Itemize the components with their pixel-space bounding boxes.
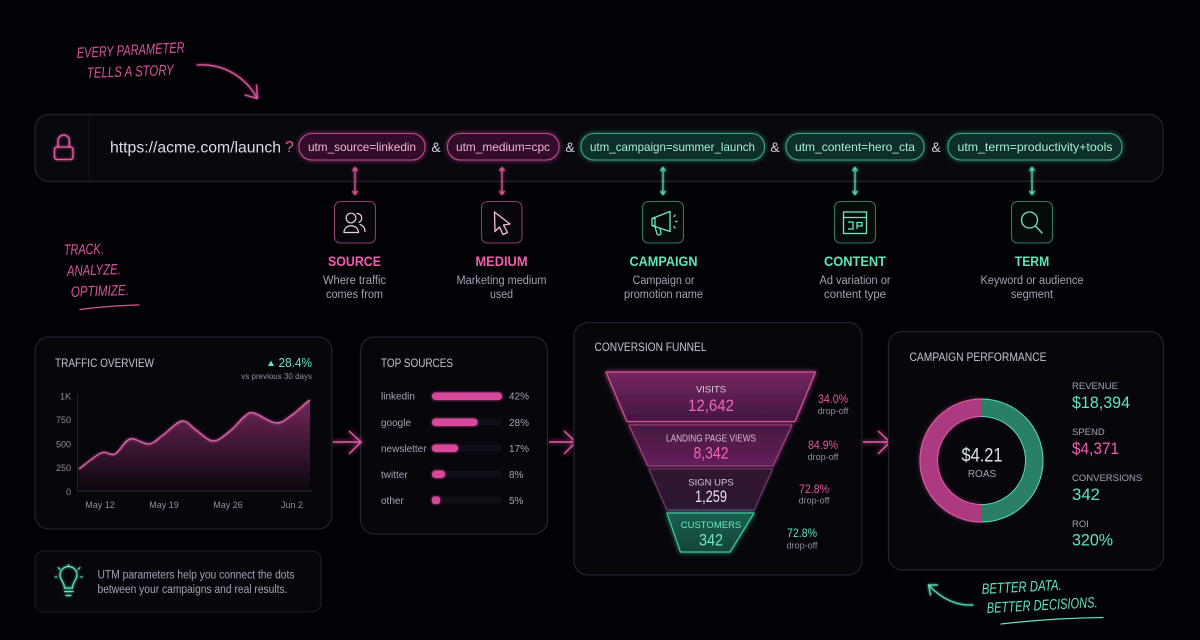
change indicator bbox=[241, 355, 312, 381]
description: comes from bbox=[326, 289, 383, 301]
tip text: between your campaigns and real results. bbox=[98, 584, 288, 596]
parameter: campaign bbox=[624, 202, 703, 301]
icon: megaphone bbox=[642, 202, 684, 243]
arrow: funnel to performance bbox=[863, 431, 890, 454]
handwritten note: every parameter: TELLS A STORY bbox=[87, 62, 175, 82]
bar list: 5% bbox=[509, 496, 524, 507]
donut chart: $4.21 bbox=[962, 446, 1002, 466]
pill: utm_campaign bbox=[581, 134, 764, 160]
parameter: term bbox=[980, 202, 1084, 301]
funnel: sign ups bbox=[649, 469, 772, 510]
drop-off labels: 34.0% bbox=[818, 394, 848, 406]
tip text: UTM parameters help you connect the dots bbox=[98, 570, 295, 582]
line chart: 1K bbox=[60, 392, 71, 402]
description: Marketing medium bbox=[456, 275, 546, 287]
parameter: content bbox=[820, 202, 891, 301]
arrow: note to performance bbox=[928, 585, 973, 605]
pill: utm_source bbox=[299, 134, 425, 160]
ampersand: & bbox=[431, 139, 441, 155]
drop-off labels: drop-off bbox=[787, 540, 818, 550]
panel: traffic overview bbox=[35, 337, 332, 529]
description bbox=[323, 275, 386, 301]
handwritten note: better data: BETTER DECISIONS. bbox=[986, 594, 1098, 617]
pill: utm_term: utm_term=productivity+tools bbox=[958, 140, 1112, 154]
line chart: May 19 bbox=[149, 500, 179, 510]
question mark: ? bbox=[285, 139, 294, 156]
ampersand: & bbox=[770, 139, 780, 155]
icon: magnifier bbox=[1012, 202, 1052, 243]
funnel: landing page views bbox=[629, 425, 792, 466]
description: content type bbox=[824, 289, 886, 301]
panel: top sources bbox=[360, 337, 548, 534]
handwritten note: track analyze optimize: ANALYZE. bbox=[66, 261, 121, 280]
heading: TRAFFIC OVERVIEW bbox=[55, 358, 154, 370]
funnel: customers bbox=[667, 513, 754, 552]
pill: utm_medium bbox=[448, 134, 559, 160]
icon: light bulb bbox=[55, 564, 82, 596]
ampersand: & bbox=[565, 139, 575, 155]
metrics: 320% bbox=[1072, 530, 1113, 550]
funnel: customers: CUSTOMERS bbox=[681, 520, 741, 531]
bar list: 28% bbox=[509, 418, 529, 429]
description: segment bbox=[1011, 289, 1054, 301]
funnel: visits: 12,642 bbox=[688, 396, 734, 415]
handwritten note: every parameter: EVERY PARAMETER bbox=[76, 39, 185, 62]
drop-off labels bbox=[787, 394, 849, 550]
description: used bbox=[490, 289, 513, 301]
handwritten note: better data: BETTER DATA. bbox=[981, 577, 1062, 598]
arrow: sources to funnel bbox=[549, 431, 576, 454]
change indicator: vs previous 30 days bbox=[241, 372, 312, 381]
bar list: google bbox=[381, 418, 411, 429]
description bbox=[624, 275, 703, 301]
metrics: SPEND bbox=[1072, 427, 1105, 438]
label: CAMPAIGN bbox=[630, 254, 698, 269]
change indicator: 28.4% bbox=[278, 355, 312, 370]
metrics: $18,394 bbox=[1072, 393, 1130, 412]
handwritten note: every parameter bbox=[76, 39, 185, 82]
donut chart: ROAS bbox=[968, 469, 996, 480]
bar list: 8% bbox=[509, 470, 524, 481]
label: CONTENT bbox=[824, 254, 887, 269]
arrows: pills to parameters bbox=[352, 168, 1034, 194]
icon: people bbox=[334, 202, 376, 243]
arrow: traffic to sources bbox=[333, 431, 361, 454]
icon: cursor bbox=[482, 202, 522, 243]
heading: CONVERSION FUNNEL bbox=[594, 342, 707, 354]
line chart: Jun 2 bbox=[281, 500, 303, 510]
bar list: 42% bbox=[509, 392, 529, 402]
description bbox=[820, 275, 891, 301]
parameter: medium bbox=[456, 202, 546, 301]
funnel: sign ups: SIGN UPS bbox=[688, 478, 734, 488]
arrow: note to URL bar bbox=[197, 65, 258, 98]
icon: ad window bbox=[834, 202, 876, 243]
line chart: 750 bbox=[56, 415, 71, 425]
line chart: 250 bbox=[56, 463, 71, 473]
donut chart bbox=[920, 399, 1043, 522]
URL bar bbox=[35, 114, 1163, 182]
metrics bbox=[1072, 381, 1142, 550]
bar list: twitter bbox=[381, 470, 408, 481]
funnel: customers: 342 bbox=[699, 532, 723, 550]
metrics: $4,371 bbox=[1072, 439, 1119, 458]
icon: lock bbox=[54, 135, 73, 160]
handwritten note: track analyze optimize bbox=[64, 241, 139, 310]
description: Where traffic bbox=[323, 275, 386, 287]
drop-off labels: drop-off bbox=[818, 406, 849, 416]
URL text: https://acme.com/launch bbox=[110, 140, 281, 156]
pill: utm_source: utm_source=linkedin bbox=[308, 140, 416, 154]
parameter: source bbox=[323, 202, 386, 301]
bar list bbox=[381, 392, 529, 507]
drop-off labels: drop-off bbox=[799, 496, 830, 506]
handwritten note: track analyze optimize: OPTIMIZE. bbox=[71, 282, 129, 301]
line chart bbox=[56, 392, 312, 510]
description: Campaign or bbox=[632, 275, 695, 287]
label: SOURCE bbox=[328, 254, 381, 269]
bar list: 17% bbox=[509, 444, 529, 455]
funnel: visits: VISITS bbox=[696, 384, 726, 396]
description bbox=[456, 275, 546, 301]
label: MEDIUM bbox=[476, 254, 528, 269]
funnel: landing page views: LANDING PAGE VIEWS bbox=[666, 434, 756, 444]
metrics: ROI bbox=[1072, 519, 1089, 530]
drop-off labels: drop-off bbox=[808, 452, 839, 462]
line chart: May 12 bbox=[85, 500, 115, 510]
funnel: landing page views: 8,342 bbox=[694, 444, 728, 462]
panel: campaign performance bbox=[888, 332, 1164, 570]
pill: utm_campaign: utm_campaign=summer_launch bbox=[590, 140, 755, 154]
description bbox=[980, 275, 1084, 301]
metrics: 342 bbox=[1072, 485, 1100, 504]
funnel: visits bbox=[606, 372, 816, 422]
tip box bbox=[35, 551, 321, 612]
line chart: 0 bbox=[66, 487, 71, 497]
description: Keyword or audience bbox=[980, 275, 1084, 287]
panel: conversion funnel bbox=[574, 322, 862, 575]
bar list: linkedin bbox=[381, 392, 415, 402]
handwritten note: better data bbox=[981, 577, 1103, 624]
description: promotion name bbox=[624, 289, 703, 301]
pill: utm_content bbox=[786, 134, 924, 160]
metrics: REVENUE bbox=[1072, 381, 1118, 392]
drop-off labels: 72.8% bbox=[799, 484, 829, 496]
bar list: newsletter bbox=[381, 444, 427, 455]
handwritten note: track analyze optimize: TRACK. bbox=[64, 241, 104, 259]
pill: utm_content: utm_content=hero_cta bbox=[795, 140, 915, 154]
pill: utm_medium: utm_medium=cpc bbox=[456, 140, 550, 154]
description: Ad variation or bbox=[820, 275, 891, 287]
funnel: sign ups: 1,259 bbox=[695, 488, 727, 506]
drop-off labels: 72.8% bbox=[787, 528, 817, 540]
label: TERM bbox=[1015, 254, 1049, 269]
line chart: May 26 bbox=[213, 500, 243, 510]
drop-off labels: 84.9% bbox=[808, 440, 838, 452]
heading: CAMPAIGN PERFORMANCE bbox=[910, 352, 1047, 364]
bar list: other bbox=[381, 496, 404, 507]
metrics: CONVERSIONS bbox=[1072, 473, 1142, 484]
ampersand: & bbox=[931, 139, 941, 155]
line chart: 500 bbox=[56, 440, 71, 450]
heading: TOP SOURCES bbox=[381, 358, 453, 370]
pill: utm_term bbox=[948, 134, 1122, 160]
